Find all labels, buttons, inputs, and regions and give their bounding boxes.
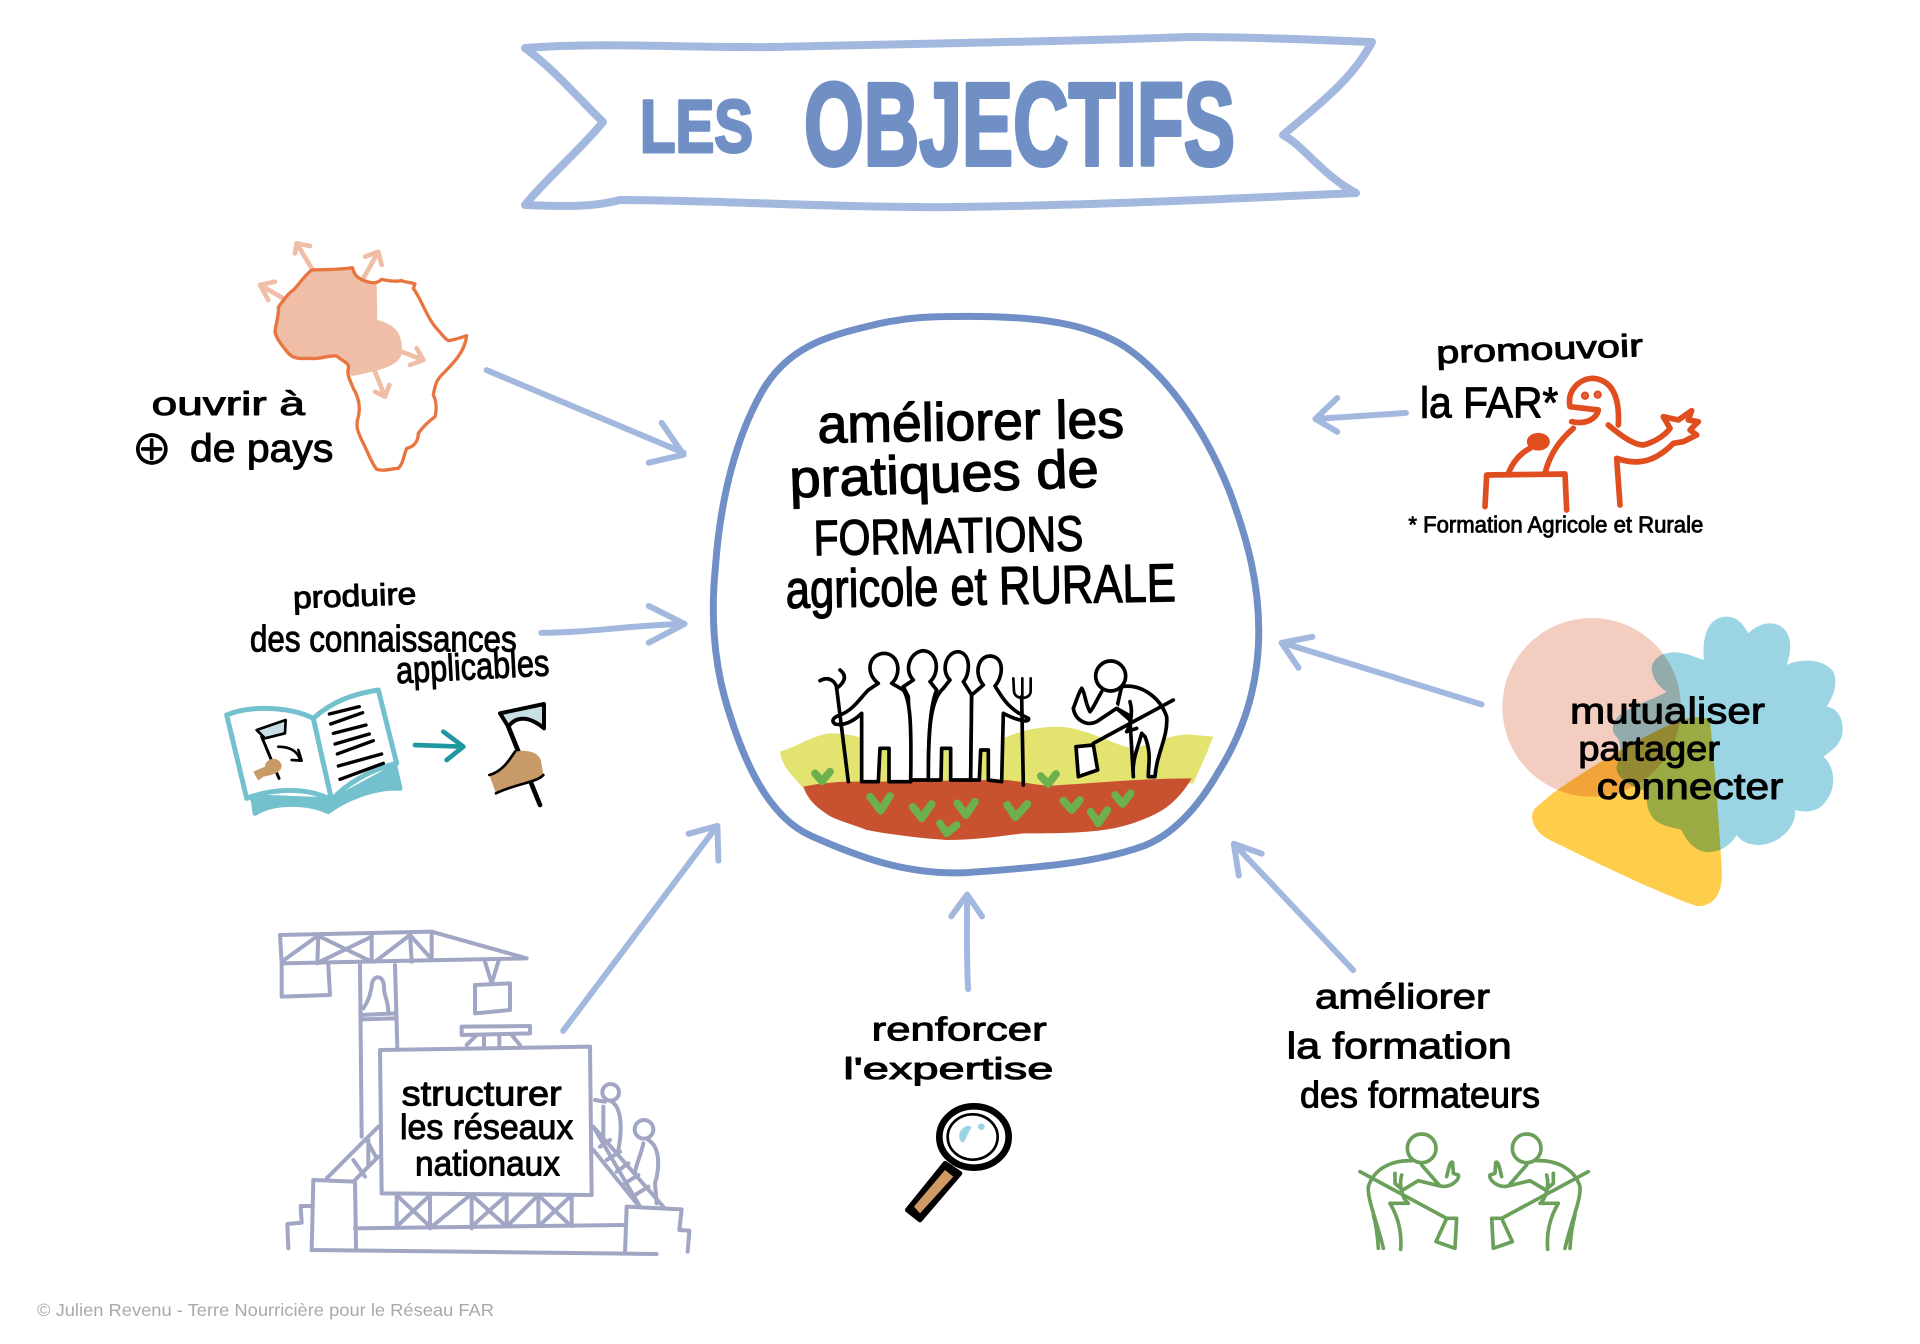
- arrow: from structurer to centre: [563, 826, 718, 1031]
- panel: structurer les réseaux nationaux: [280, 932, 689, 1254]
- icon: Africa shaded zone: [275, 268, 402, 376]
- central heading text: agricole et RURALE: [785, 553, 1176, 620]
- arrow: from produire to centre: [541, 606, 685, 643]
- panel: produire des connaissances: [227, 577, 550, 813]
- central heading text: pratiques de: [788, 439, 1100, 509]
- label: améliorer la formation des formateurs: des formateurs: [1300, 1074, 1540, 1115]
- label: améliorer la formation des formateurs: [1287, 977, 1540, 1115]
- label: structurer les réseaux nationaux: nationaux: [415, 1145, 560, 1184]
- icon: left trainer with hoe: [1360, 1134, 1459, 1249]
- label: structurer les réseaux nationaux: structurer: [402, 1075, 562, 1114]
- footnote: Formation Agricole et Rurale: * Formation Agricole et Rurale: [1408, 511, 1703, 537]
- label: produire des connaissances applicables: des connaissances: [250, 618, 517, 660]
- arrow: from mutualiser to centre: [1282, 637, 1482, 704]
- arrow: from ouvrir to centre: [487, 370, 684, 463]
- icon: plus sign in circle: [138, 435, 166, 463]
- footer credit: © Julien Revenu - Terre Nourricière pour le Réseau FAR: [37, 1300, 494, 1320]
- icon: large hoe in hand: [489, 704, 544, 805]
- label: améliorer la formation des formateurs: la formation: [1287, 1025, 1512, 1066]
- central blob outline: [713, 316, 1259, 873]
- icon: small hoe in hand on book: [253, 720, 302, 781]
- label: structurer les réseaux nationaux: [400, 1075, 574, 1184]
- label: mutualiser partager connecter: partager: [1578, 730, 1720, 769]
- overlapping coloured shapes: [1502, 617, 1843, 906]
- title banner: [525, 37, 1372, 207]
- icon: right trainer with hoe: [1490, 1134, 1588, 1249]
- icon: speaker at podium: [1485, 378, 1698, 510]
- text lines on book page: [329, 707, 383, 779]
- panel: ouvrir à plus de pays: [138, 243, 467, 471]
- bending farmer with hoe: [1073, 661, 1173, 777]
- arrow: from renforcer to centre: [951, 895, 982, 989]
- label: de pays: de pays: [190, 427, 333, 471]
- sign panel: [380, 1047, 592, 1195]
- label: améliorer la formation des formateurs: améliorer: [1315, 977, 1490, 1016]
- arrow: from promouvoir to centre: [1315, 398, 1406, 432]
- label: mutualiser partager connecter: [1570, 689, 1783, 807]
- central panel: améliorer les pratiques: [713, 316, 1259, 873]
- label: structurer les réseaux nationaux: les réseaux: [400, 1108, 574, 1147]
- seedlings: [815, 772, 1131, 833]
- central heading text: FORMATIONS: [813, 506, 1084, 566]
- central heading text: [785, 389, 1176, 620]
- label: produire des connaissances applicables: produire: [292, 577, 417, 615]
- label: mutualiser partager connecter: connecter: [1597, 765, 1783, 807]
- group of four standing people: [833, 651, 1029, 782]
- panel: mutualiser partager connecter: [1502, 617, 1843, 906]
- label: promouvoir: promouvoir: [1436, 327, 1644, 370]
- red soil: [803, 778, 1192, 840]
- label: la FAR: la FAR*: [1420, 378, 1558, 427]
- yellow hills: [780, 727, 1213, 788]
- panel: améliorer la formation des formateurs: [1287, 977, 1588, 1249]
- icon: expansion arrows: [260, 243, 423, 397]
- label: renforcer l'expertise: [843, 1012, 1053, 1086]
- label: mutualiser partager connecter: mutualiser: [1570, 689, 1765, 731]
- central heading text: améliorer les: [817, 389, 1125, 455]
- banner ribbon outline: [525, 37, 1372, 207]
- panel: renforcer l'expertise: [843, 1012, 1053, 1220]
- label: renforcer l'expertise: renforcer: [872, 1012, 1047, 1049]
- illustration: farmers in field: [780, 651, 1213, 840]
- icon: Africa outline: [275, 268, 467, 470]
- title text: objectifs: OBJECTIFS: [804, 59, 1235, 191]
- hoe and fork tools: [820, 670, 1031, 785]
- label: renforcer l'expertise: l'expertise: [843, 1052, 1053, 1086]
- label: produire des connaissances applicables: [250, 577, 550, 691]
- arrow: teal book to tool: [415, 732, 463, 760]
- label: produire des connaissances applicables: applicables: [395, 641, 550, 691]
- icon: open book: [227, 690, 400, 813]
- panel: promouvoir la FAR: [1408, 327, 1703, 537]
- icon: magnifying glass: [907, 1106, 1009, 1220]
- icon: crane and stage: [280, 932, 689, 1254]
- title text: les: LES: [640, 85, 753, 168]
- arrow: from améliorer la formation to centre: [1234, 844, 1353, 970]
- label: ouvrir à: ouvrir à: [152, 386, 306, 423]
